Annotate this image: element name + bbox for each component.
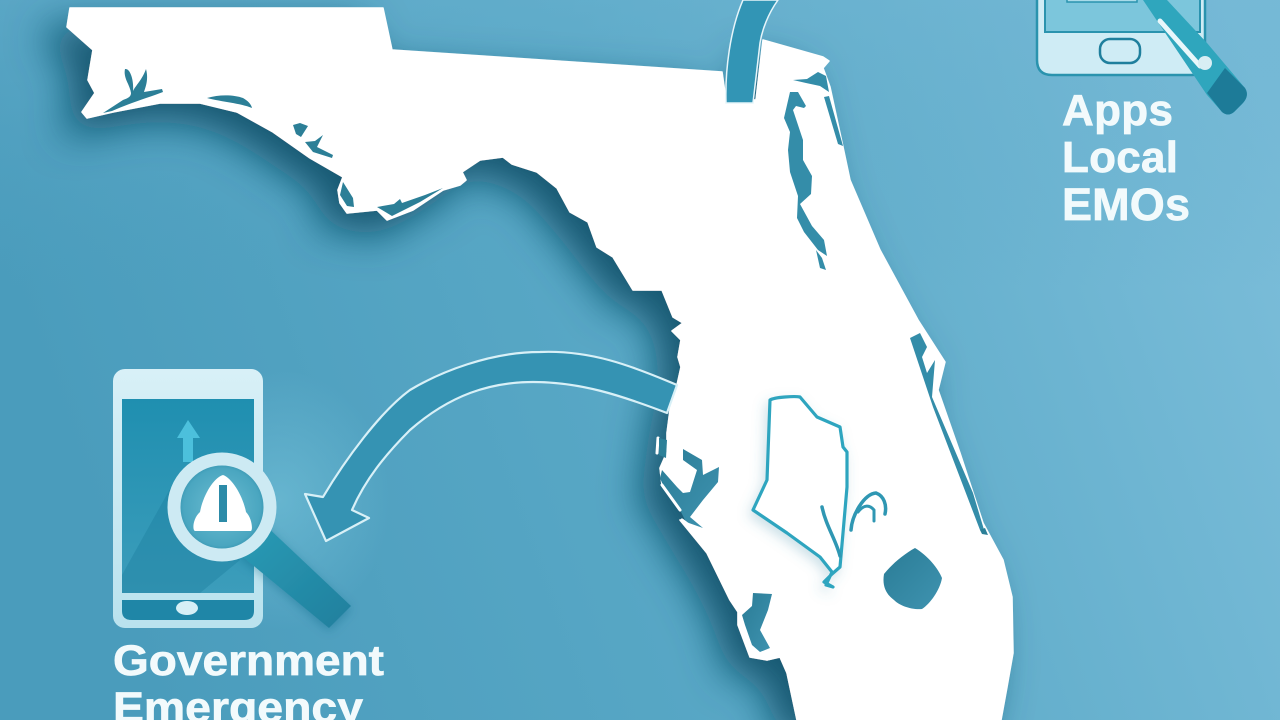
government phone with magnifier: [113, 369, 351, 628]
phone home bar: [122, 600, 254, 620]
label: Local: Local: [1062, 133, 1178, 182]
magnifier shadow: [122, 480, 240, 593]
stylus: [1143, 0, 1247, 114]
phone body: [1037, 0, 1205, 75]
label: Apps: Apps: [1062, 86, 1173, 135]
apps phone with stylus: [1037, 0, 1247, 114]
inland streams: [822, 493, 886, 556]
Charlotte Harbor: [742, 593, 772, 652]
stylus clip dot: [1198, 56, 1212, 70]
phone screen: [122, 399, 254, 593]
arrow: from map to top: [726, 0, 778, 103]
Tampa Bay: [660, 449, 719, 528]
phone body: [113, 369, 263, 628]
east coast lagoon: [910, 333, 985, 533]
Lake outline: [753, 397, 847, 587]
map silhouette: [67, 8, 1013, 720]
magnifier ring: [174, 459, 270, 555]
phone screen: [1045, 0, 1200, 32]
stylus highlight: [1160, 21, 1200, 66]
magnifier handle: [238, 522, 351, 628]
exclamation bar: [219, 485, 227, 522]
small inlet: [980, 528, 988, 535]
stylus dark end: [1207, 68, 1247, 114]
panhandle coastal details: [103, 69, 443, 216]
inner bay water: [659, 438, 667, 458]
up arrow icon: [177, 420, 200, 462]
inner content block: [1067, 0, 1137, 2]
Lake Okeechobee: [883, 548, 942, 609]
label: Government: Government: [113, 637, 384, 685]
home button: [1100, 39, 1140, 63]
home button: [176, 601, 198, 615]
arrow: map to government alerts phone: [305, 352, 677, 541]
northeast rivers: [784, 72, 843, 270]
label: EMOs: EMOs: [1062, 179, 1190, 230]
barrier island slivers: [657, 438, 690, 526]
map of Florida: [67, 8, 1013, 720]
alert bell icon: [193, 475, 252, 531]
